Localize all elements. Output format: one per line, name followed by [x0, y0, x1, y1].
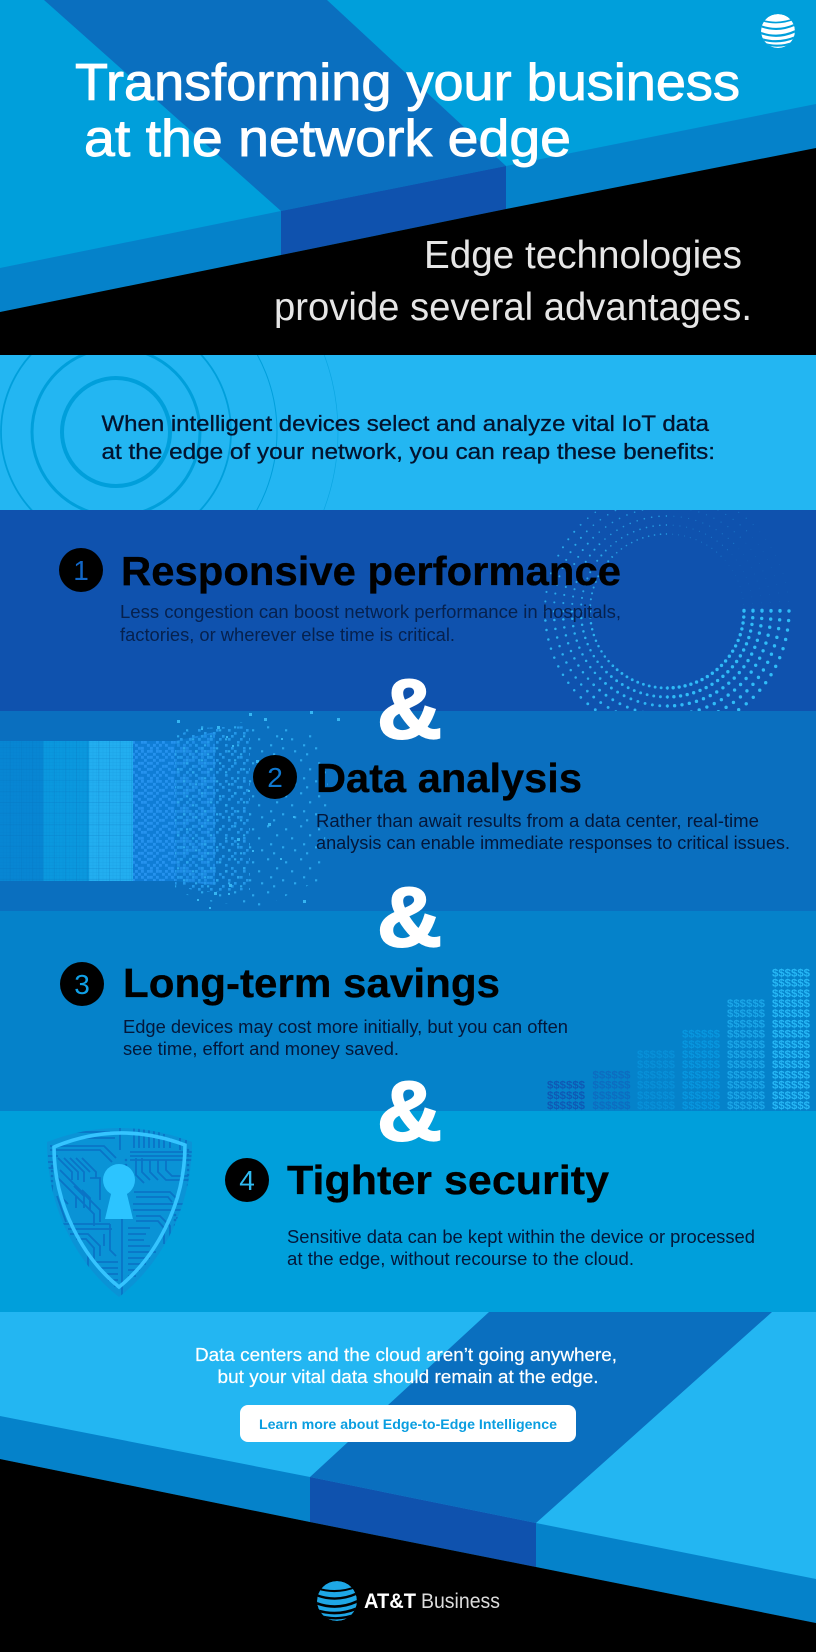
- chart: dollar bars: $$$$$$: [772, 1029, 811, 1041]
- closing statement: [195, 1345, 617, 1387]
- intro text: at the edge of your network, you can reap these benefits:: [102, 439, 715, 464]
- closing statement: but your vital data should remain at the edge.: [218, 1367, 598, 1387]
- chart: dollar bars: $$$$$$: [592, 1090, 631, 1102]
- chart: dollar bars: $$$$$$: [772, 1008, 811, 1020]
- chart: dollar bars: $$$$$$: [727, 1049, 766, 1061]
- chart: dollar bars: $$$$$$: [772, 1069, 811, 1081]
- fold left: [0, 211, 281, 312]
- heading: Data analysis: [316, 755, 582, 801]
- black wedge: [0, 148, 816, 355]
- chart: dollar bars: [547, 967, 811, 1112]
- pixel dissolve graphic: [0, 711, 340, 909]
- chart: dollar bars: $$$$$$: [727, 1029, 766, 1041]
- fold center: [310, 1477, 536, 1567]
- AT&T Business logo: Business: [421, 1590, 500, 1613]
- button: [240, 1405, 576, 1442]
- heading: Responsive performance: [121, 548, 621, 594]
- body text: Less congestion can boost network performance in hospitals,: [120, 602, 621, 622]
- body text: [316, 811, 790, 853]
- chart: dollar bars: $$$$$$: [637, 1100, 676, 1112]
- chart: dollar bars: $$$$$$: [682, 1080, 721, 1092]
- ampersand connectors: &: [377, 1064, 442, 1158]
- title: [75, 54, 740, 168]
- chart: dollar bars: $$$$$$: [682, 1059, 721, 1071]
- chart: dollar bars: $$$$$$: [727, 1080, 766, 1092]
- button: Learn more about Edge-to-Edge Intelligence: [259, 1417, 558, 1432]
- fold left: [0, 1416, 310, 1522]
- body text: [120, 602, 621, 645]
- title: Transforming your business: [75, 54, 740, 112]
- subtitle: [274, 234, 752, 329]
- number badge 3: 3: [74, 969, 90, 1000]
- chart: dollar bars: $$$$$$: [772, 988, 811, 1000]
- chart: dollar bars: $$$$$$: [772, 1080, 811, 1092]
- intro text: [102, 411, 715, 464]
- chart: dollar bars: $$$$$$: [772, 1039, 811, 1051]
- dotted ring graphic: [544, 510, 791, 711]
- number badge 2: [253, 755, 297, 799]
- chart: dollar bars: $$$$$$: [727, 1059, 766, 1071]
- diagonal band: [44, 0, 506, 211]
- chart: dollar bars: $$$$$$: [772, 967, 811, 979]
- chart: dollar bars: $$$$$$: [547, 1080, 586, 1092]
- ampersand connectors: &: [377, 870, 442, 964]
- chart: dollar bars: $$$$$$: [772, 1059, 811, 1071]
- chart: dollar bars: $$$$$$: [637, 1049, 676, 1061]
- chart: dollar bars: $$$$$$: [772, 978, 811, 990]
- chart: dollar bars: $$$$$$: [637, 1059, 676, 1071]
- AT&T Business logo: [316, 1581, 500, 1621]
- body text: [123, 1017, 568, 1059]
- intro text: When intelligent devices select and analyze vital IoT data: [102, 411, 710, 436]
- icon: shield with keyhole: [47, 1128, 192, 1296]
- body text: see time, effort and money saved.: [123, 1039, 399, 1059]
- ampersand connectors: &: [377, 662, 442, 756]
- ampersand connectors: [377, 662, 442, 1158]
- body text: Sensitive data can be kept within the device or processed: [287, 1227, 755, 1247]
- heading: Long-term savings: [123, 960, 500, 1006]
- chart: dollar bars: $$$$$$: [682, 1069, 721, 1081]
- chart: dollar bars: $$$$$$: [547, 1090, 586, 1102]
- closing statement: Data centers and the cloud aren’t going anywhere,: [195, 1345, 617, 1365]
- chart: dollar bars: $$$$$$: [727, 1039, 766, 1051]
- AT&T Business logo: AT&T: [364, 1590, 416, 1613]
- heading: Tighter security: [287, 1157, 609, 1203]
- chart: dollar bars: $$$$$$: [727, 998, 766, 1010]
- number badge 2: 2: [267, 762, 283, 793]
- diagonal band: [310, 1312, 772, 1523]
- icon: AT&T globe: [760, 14, 796, 48]
- body text: Edge devices may cost more initially, but you can often: [123, 1017, 568, 1037]
- chart: dollar bars: $$$$$$: [637, 1080, 676, 1092]
- chart: dollar bars: $$$$$$: [682, 1090, 721, 1102]
- fold right: [536, 1523, 816, 1623]
- chart: dollar bars: $$$$$$: [682, 1049, 721, 1061]
- body text: factories, or wherever else time is critical.: [120, 625, 455, 645]
- subtitle: provide several advantages.: [274, 286, 752, 329]
- chart: dollar bars: $$$$$$: [727, 1069, 766, 1081]
- chart: dollar bars: $$$$$$: [637, 1090, 676, 1102]
- title: at the network edge: [84, 110, 571, 168]
- chart: dollar bars: $$$$$$: [727, 1090, 766, 1102]
- chart: dollar bars: $$$$$$: [727, 1018, 766, 1030]
- panel: responsive performance: [0, 510, 816, 711]
- body text: analysis can enable immediate responses to critical issues.: [316, 833, 790, 853]
- panel: tighter security: [0, 1111, 816, 1312]
- number badge 4: [225, 1158, 269, 1202]
- panel: footer: [0, 1312, 816, 1652]
- concentric rings: [0, 355, 338, 510]
- chart: dollar bars: $$$$$$: [682, 1039, 721, 1051]
- chart: dollar bars: $$$$$$: [727, 1008, 766, 1020]
- fold right: [506, 104, 816, 209]
- chart: dollar bars: $$$$$$: [592, 1080, 631, 1092]
- panel: header: [0, 0, 816, 355]
- number badge 3: [60, 962, 104, 1006]
- number badge 1: 1: [73, 555, 89, 586]
- panel: long-term savings: [0, 911, 816, 1112]
- black wedge: [0, 1459, 816, 1652]
- body text: Rather than await results from a data center, real-time: [316, 811, 759, 831]
- chart: dollar bars: $$$$$$: [682, 1029, 721, 1041]
- chart: dollar bars: $$$$$$: [592, 1069, 631, 1081]
- chart: dollar bars: $$$$$$: [772, 1100, 811, 1112]
- chart: dollar bars: $$$$$$: [772, 1049, 811, 1061]
- chart: dollar bars: $$$$$$: [772, 998, 811, 1010]
- body text: [287, 1227, 755, 1269]
- number badge 1: [59, 548, 103, 592]
- fold center: [281, 166, 506, 255]
- chart: dollar bars: $$$$$$: [727, 1100, 766, 1112]
- chart: dollar bars: $$$$$$: [772, 1090, 811, 1102]
- subtitle: Edge technologies: [424, 234, 742, 277]
- panel: data analysis: [0, 711, 816, 911]
- number badge 4: 4: [239, 1165, 255, 1196]
- body text: at the edge, without recourse to the cloud.: [287, 1249, 634, 1269]
- chart: dollar bars: $$$$$$: [772, 1018, 811, 1030]
- panel: intro: [0, 355, 816, 510]
- chart: dollar bars: $$$$$$: [547, 1100, 586, 1112]
- chart: dollar bars: $$$$$$: [682, 1100, 721, 1112]
- chart: dollar bars: $$$$$$: [637, 1069, 676, 1081]
- chart: dollar bars: $$$$$$: [592, 1100, 631, 1112]
